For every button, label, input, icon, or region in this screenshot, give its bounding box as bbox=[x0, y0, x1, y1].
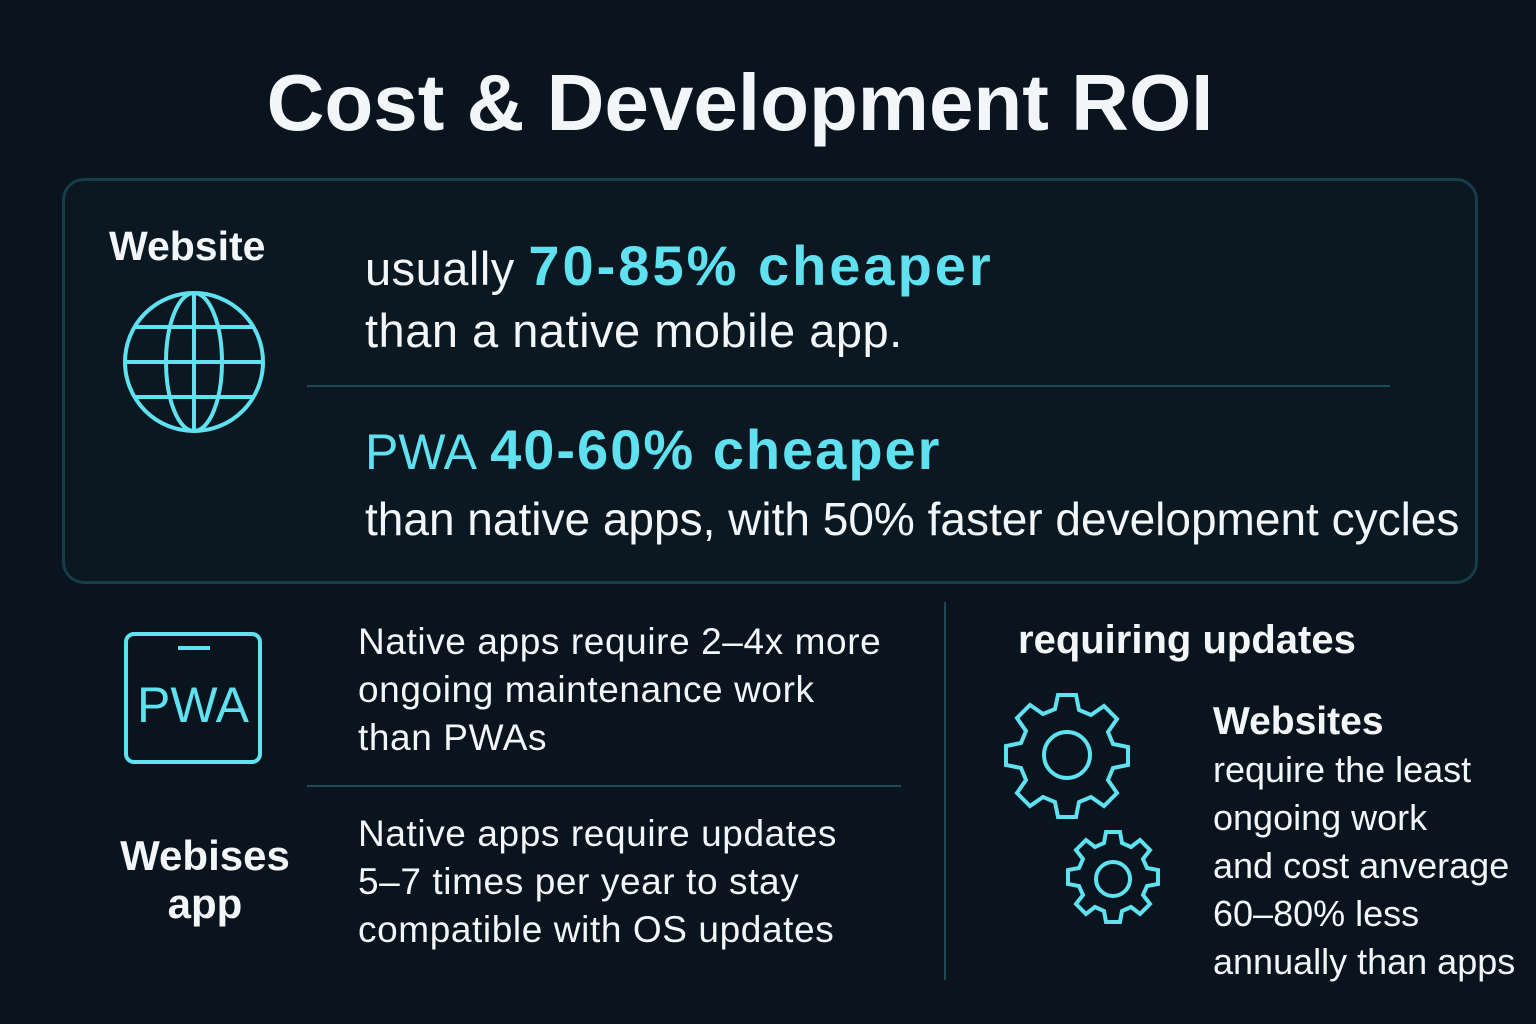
text: websites least work: ongoing work bbox=[1213, 797, 1427, 838]
text: website cost bbox=[365, 234, 994, 357]
text: PWA cost bbox=[365, 418, 1459, 545]
text: maintenance bbox=[358, 621, 881, 758]
icon: PWA box bbox=[124, 632, 262, 764]
text: websites least work: 60–80% less bbox=[1213, 893, 1419, 934]
icon: PWA box: PWA bbox=[137, 677, 249, 733]
text: maintenance: than PWAs bbox=[358, 717, 547, 758]
label: Webises app: app bbox=[168, 880, 242, 927]
text: updates bbox=[358, 813, 837, 950]
text: maintenance: Native apps require 2–4x more bbox=[358, 621, 881, 662]
text: websites least work: and cost anverage bbox=[1213, 845, 1509, 886]
icon: gears bbox=[1004, 693, 1160, 924]
label: Website: Website bbox=[109, 223, 265, 269]
text: updates: 5–7 times per year to stay bbox=[358, 861, 799, 902]
text: updates: Native apps require updates bbox=[358, 813, 837, 854]
panel: cost comparison bbox=[62, 178, 1478, 584]
text: PWA cost: PWA 40-60% cheaper bbox=[365, 418, 941, 481]
text: website cost: than a native mobile app. bbox=[365, 304, 903, 357]
label: Webises app bbox=[120, 832, 290, 927]
title: Cost & Development ROI bbox=[267, 58, 1213, 147]
text: PWA cost: than native apps, with 50% faster development cycles bbox=[365, 493, 1459, 545]
text: websites least work: Websites bbox=[1213, 700, 1384, 743]
text: websites least work bbox=[1213, 700, 1515, 982]
text: website cost: usually 70-85% cheaper bbox=[365, 234, 994, 297]
label: Webises app: Webises bbox=[120, 832, 290, 879]
heading: requiring updates: requiring updates bbox=[1018, 618, 1356, 662]
text: websites least work: require the least bbox=[1213, 749, 1471, 790]
text: maintenance: ongoing maintenance work bbox=[358, 669, 815, 710]
text: websites least work: annually than apps bbox=[1213, 941, 1515, 982]
text: updates: compatible with OS updates bbox=[358, 909, 834, 950]
icon: globe bbox=[123, 291, 265, 433]
